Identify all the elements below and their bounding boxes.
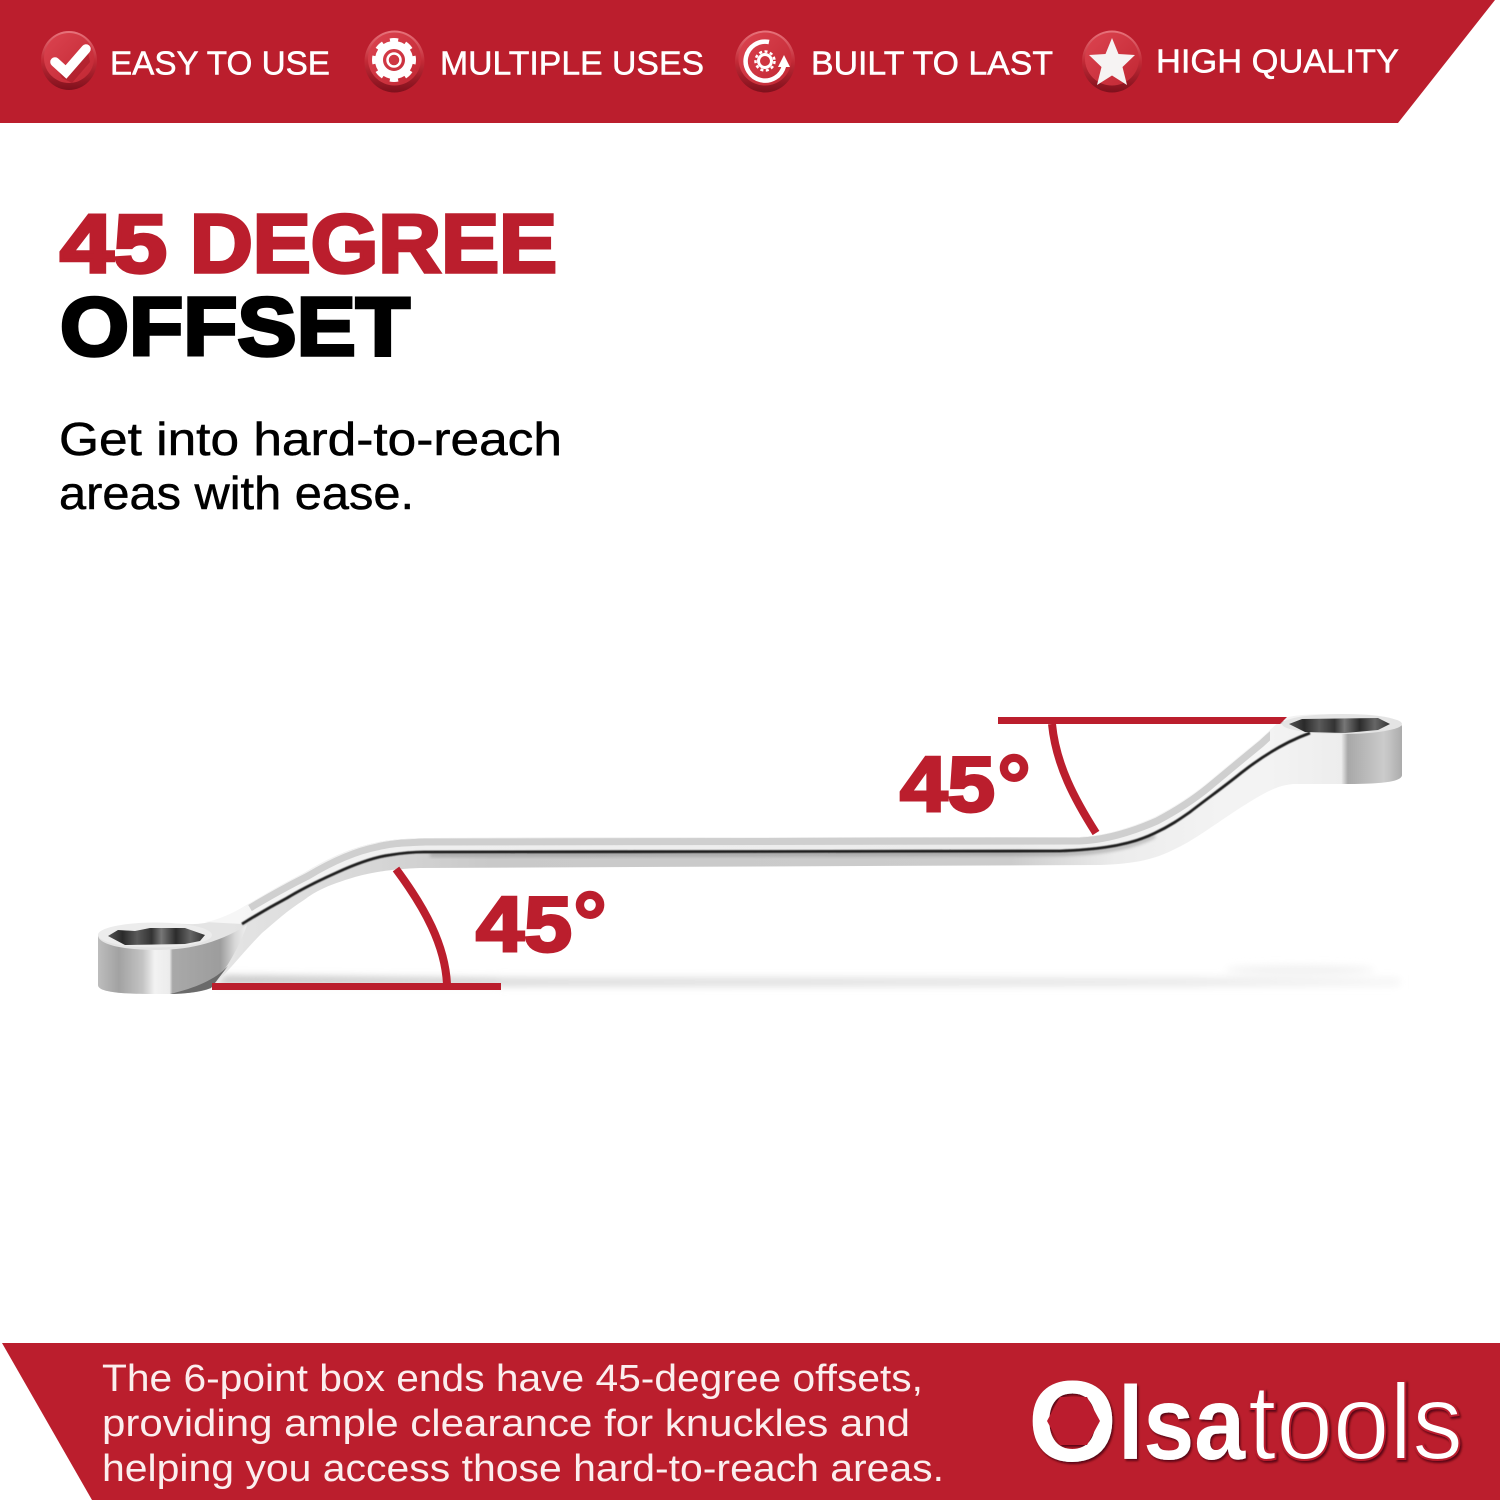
title: 45 bbox=[60, 197, 167, 290]
left ring shaded corner bbox=[170, 966, 228, 994]
title: OFFSET bbox=[60, 280, 410, 373]
left ring top bbox=[98, 922, 212, 948]
intro text: areas with ease. bbox=[59, 467, 414, 519]
right ring side bbox=[1270, 724, 1402, 790]
title bbox=[60, 197, 557, 373]
right ring hole bbox=[1289, 718, 1390, 733]
footer description: The 6-point box ends have 45-degree offsets, bbox=[102, 1358, 923, 1400]
logo: Olsatools: tools bbox=[1248, 1361, 1463, 1482]
footer description: helping you access those hard-to-reach areas. bbox=[102, 1448, 944, 1490]
left ring side bbox=[98, 925, 247, 994]
lower angle value: 45 bbox=[476, 880, 572, 968]
wrench body bbox=[98, 714, 1402, 994]
icon: gear badge bbox=[364, 30, 424, 92]
dark reflection line bbox=[242, 733, 1310, 924]
label: high quality: HIGH QUALITY bbox=[1156, 42, 1399, 80]
upper angle value: 45 bbox=[900, 740, 995, 828]
ground shadow bbox=[215, 966, 1400, 986]
wrench bbox=[98, 714, 1402, 994]
soft shading below reflection line bbox=[430, 836, 1155, 855]
upper baseline bbox=[998, 717, 1287, 724]
lower angle value: ° bbox=[573, 875, 607, 970]
grey upper stripe bbox=[250, 723, 1285, 908]
logo: Olsatools: O bbox=[1028, 1358, 1117, 1486]
header banner bbox=[0, 0, 1495, 123]
upper facet along the whole handle bbox=[205, 719, 1310, 924]
label: easy to use: EASY TO USE bbox=[110, 44, 330, 82]
footer banner bbox=[2, 1343, 1500, 1500]
upper angle marker bbox=[900, 717, 1287, 833]
icon: check mark badge bbox=[41, 31, 97, 90]
footer description: providing ample clearance for knuckles and bbox=[102, 1403, 910, 1445]
footer description bbox=[102, 1358, 944, 1490]
icon: cycle gear badge bbox=[735, 30, 795, 92]
upper angle value: ° bbox=[997, 738, 1031, 833]
lower angle marker bbox=[212, 869, 607, 990]
intro text bbox=[59, 413, 562, 519]
label: multiple uses: MULTIPLE USES bbox=[440, 44, 704, 82]
left ring hole bbox=[108, 928, 205, 945]
icon: star badge bbox=[1082, 30, 1142, 92]
right ring top bbox=[1282, 714, 1402, 734]
label: built to last: BUILT TO LAST bbox=[811, 44, 1053, 82]
title: DEGREE bbox=[190, 197, 557, 290]
logo: Olsatools bbox=[1028, 1358, 1463, 1486]
upper arc bbox=[1052, 724, 1096, 833]
logo: Olsatools: lsa bbox=[1118, 1366, 1246, 1482]
lower baseline bbox=[212, 983, 501, 990]
lower arc bbox=[396, 869, 447, 984]
intro text: Get into hard-to-reach bbox=[59, 413, 562, 465]
